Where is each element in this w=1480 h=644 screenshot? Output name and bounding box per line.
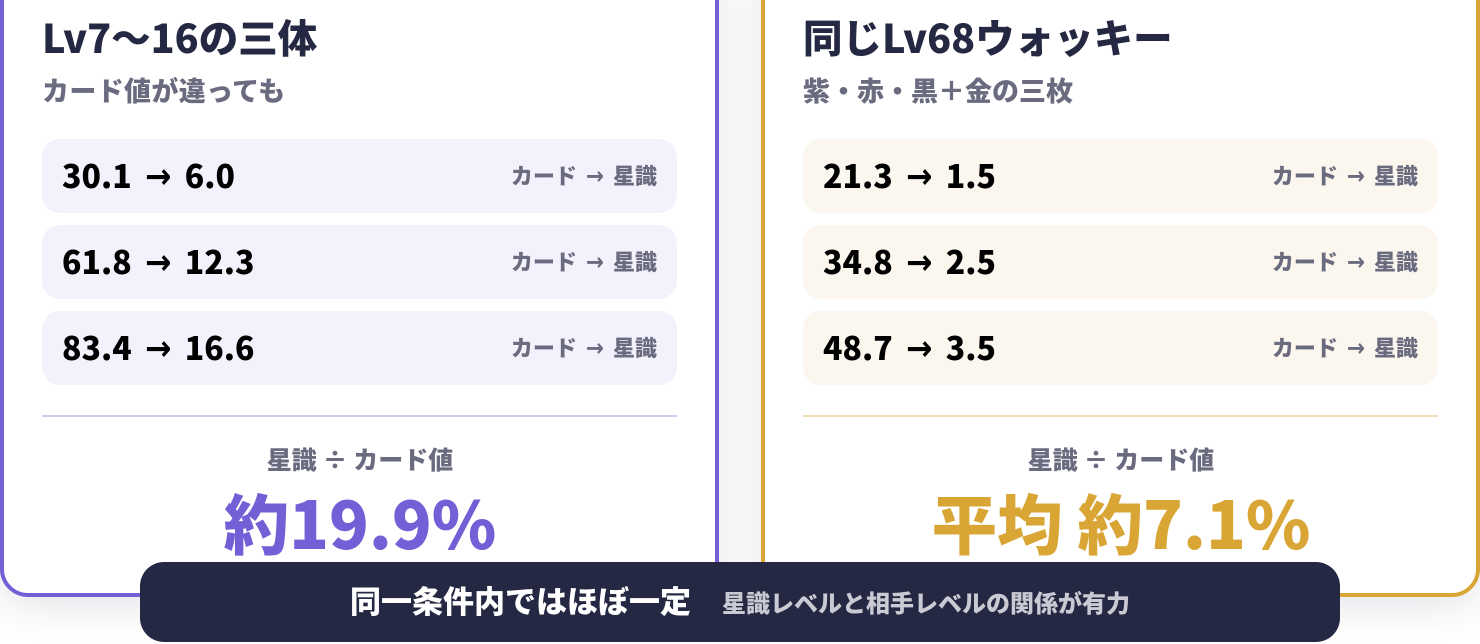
- conclusion banner: [140, 562, 1340, 642]
- panel: right card shadow and border: [761, 0, 1480, 597]
- data row 3: [803, 311, 1438, 385]
- data row 1: [42, 139, 677, 213]
- data row 1: 21.3 → 1.5: [823, 152, 996, 198]
- data row 3: カード → 星識: [1272, 331, 1418, 363]
- formula caption: 星識 ÷ カード値: [267, 441, 453, 477]
- panel: left card shadow and border: [0, 0, 719, 597]
- banner main text: 同一条件内ではほぼ一定: [350, 577, 691, 622]
- panel: Lv7〜16: [42, 8, 677, 568]
- data row 1: 30.1 → 6.0: [62, 152, 235, 198]
- heading: 同じLv68ウォッキー: [803, 8, 1173, 65]
- formula caption: 星識 ÷ カード値: [1028, 441, 1214, 477]
- subheading: 紫・赤・黒＋金の三枚: [803, 70, 1073, 109]
- data row 2: [803, 225, 1438, 299]
- data row 3: カード → 星識: [511, 331, 657, 363]
- subheading: カード値が違っても: [42, 70, 285, 109]
- data row 3: 48.7 → 3.5: [823, 324, 996, 370]
- data row 2: 61.8 → 12.3: [62, 238, 254, 284]
- data row 2: 34.8 → 2.5: [823, 238, 996, 284]
- result value: 約19.9%: [224, 473, 496, 568]
- panel: 同じLv68ウォッキー: [803, 8, 1438, 568]
- data row 1: [803, 139, 1438, 213]
- data row 3: 83.4 → 16.6: [62, 324, 254, 370]
- heading: Lv7〜16の三体: [42, 8, 317, 65]
- data row 2: [42, 225, 677, 299]
- data row 3: [42, 311, 677, 385]
- data row 1: カード → 星識: [1272, 159, 1418, 191]
- result value: 平均 約7.1%: [932, 473, 1310, 568]
- data row 1: カード → 星識: [511, 159, 657, 191]
- data row 2: カード → 星識: [511, 245, 657, 277]
- banner secondary text: 星識レベルと相手レベルの関係が有力: [722, 584, 1130, 619]
- data row 2: カード → 星識: [1272, 245, 1418, 277]
